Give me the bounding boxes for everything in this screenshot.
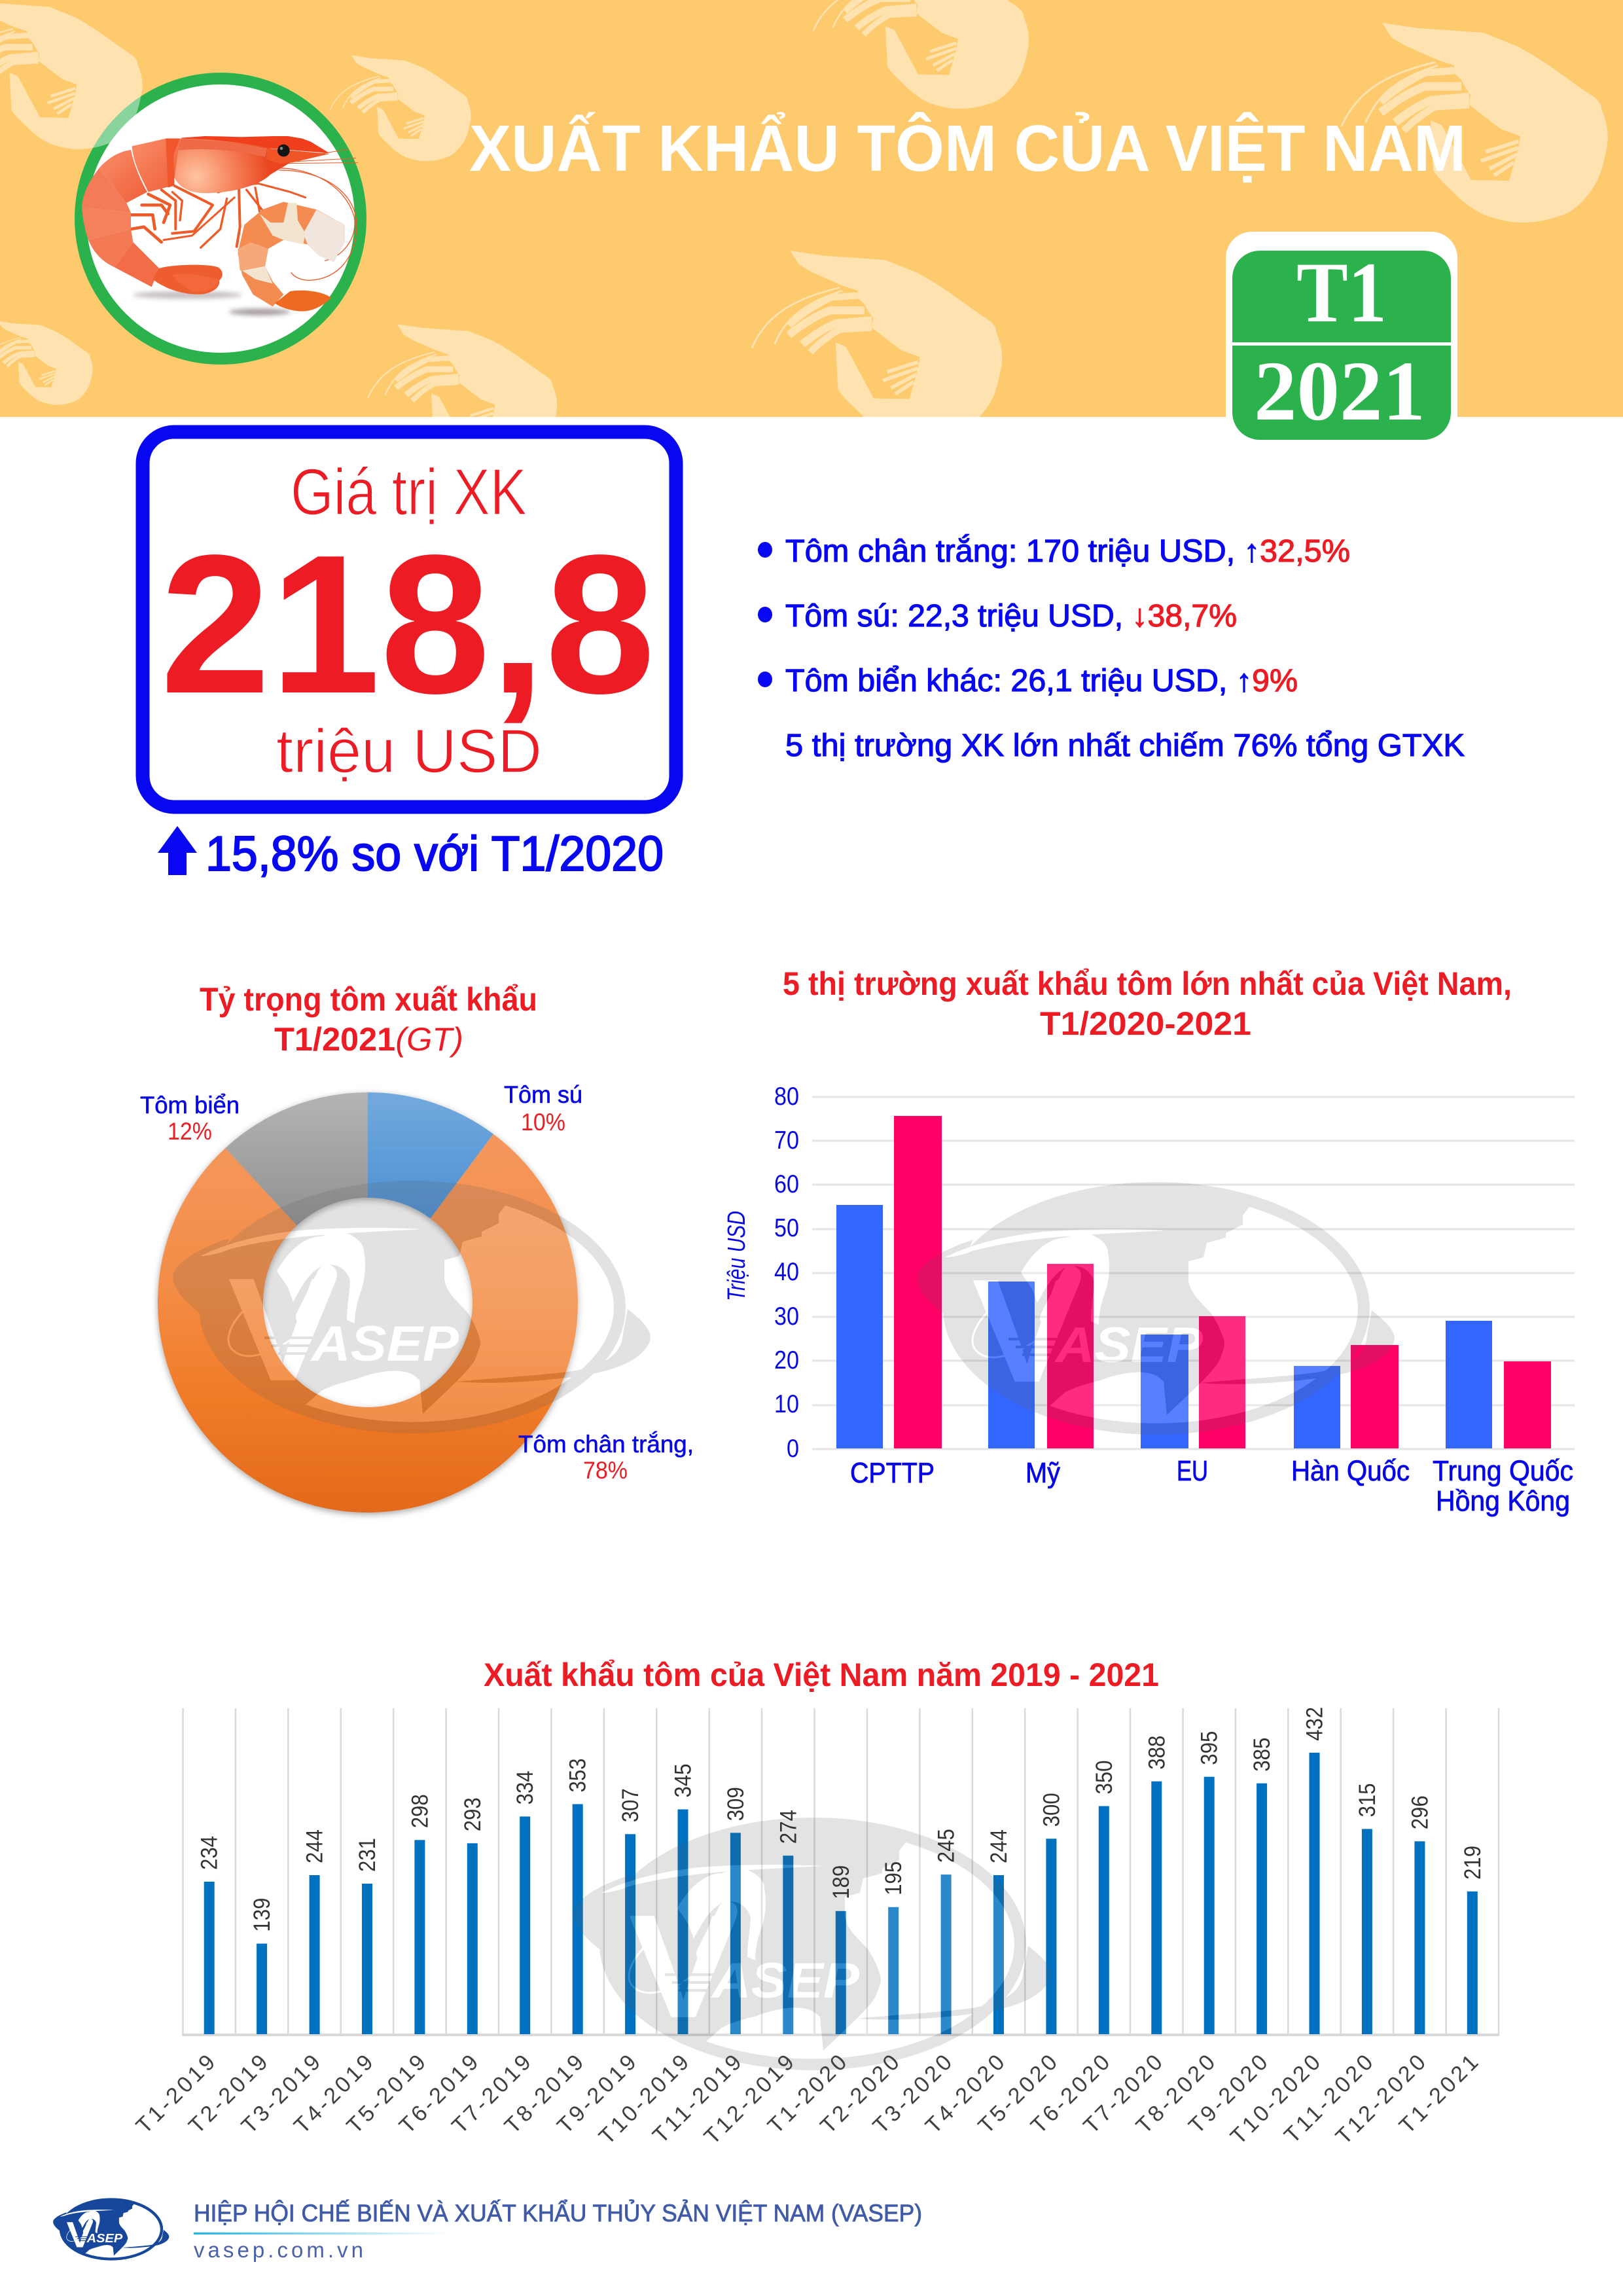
panel: key figures list bbox=[758, 533, 1465, 763]
category labels: CPTTP bbox=[850, 1457, 935, 1489]
value labels: 234 bbox=[197, 1836, 223, 1870]
donut title: Tỷ trọng tôm xuất khẩu bbox=[200, 981, 537, 1018]
title: XUẤT KHẨU TÔM CỦA VIỆT NAM bbox=[469, 111, 1466, 185]
month axis labels: T2-2019 bbox=[184, 2048, 275, 2138]
month axis labels bbox=[132, 2048, 1485, 2149]
month axis labels: T1-2021 bbox=[1395, 2048, 1485, 2138]
icon: up arrow bbox=[158, 826, 197, 875]
value labels: 244 bbox=[986, 1829, 1012, 1863]
y axis labels: 80 bbox=[774, 1083, 799, 1111]
bullet row 2: Tôm sú: 22,3 triệu USD, ↓38,7% bbox=[785, 599, 1237, 634]
month axis labels: T11-2020 bbox=[1279, 2048, 1380, 2148]
watermark: VASEP logo over bars bbox=[917, 1182, 1395, 1435]
value labels: 195 bbox=[881, 1861, 906, 1895]
value labels: 350 bbox=[1092, 1761, 1117, 1795]
watermark: VASEP logo over columns: V bbox=[628, 1884, 738, 2049]
label: Tôm sú: 10% bbox=[521, 1109, 565, 1136]
y axis labels: 10 bbox=[774, 1390, 799, 1418]
watermark: VASEP logo over columns bbox=[573, 1818, 1051, 2070]
watermark: VASEP logo over bars: ASEP bbox=[1054, 1318, 1203, 1373]
value labels: 231 bbox=[355, 1838, 380, 1872]
bars: 2021 series bbox=[894, 1116, 1551, 1448]
month axis labels: T8-2020 bbox=[1132, 2048, 1222, 2138]
badge year: 2021 bbox=[1254, 344, 1425, 439]
value labels: 388 bbox=[1144, 1736, 1169, 1770]
value labels: 293 bbox=[460, 1797, 486, 1831]
watermark: VASEP logo over bars: V bbox=[972, 1248, 1082, 1413]
category labels: Trung Quốc bbox=[1433, 1455, 1573, 1487]
footer organisation name: HIỆP HỘI CHẾ BIẾN VÀ XUẤT KHẨU THỦY SẢN VIỆT NAM (VASEP) bbox=[194, 2199, 922, 2227]
label: Tôm sú bbox=[504, 1081, 582, 1136]
value labels bbox=[197, 1707, 1486, 1932]
value labels: 245 bbox=[934, 1829, 959, 1863]
donut rings bbox=[158, 1092, 578, 1513]
value labels: 307 bbox=[618, 1788, 643, 1822]
period badge bbox=[1226, 232, 1457, 440]
panel: monthly export column chart bbox=[132, 1657, 1499, 2149]
month axis labels: T9-2019 bbox=[552, 2048, 643, 2138]
month axis labels: T6-2019 bbox=[395, 2048, 485, 2138]
panel: export value bbox=[143, 432, 676, 807]
chart title: 5 thị trường xuất khẩu tôm lớn nhất của Việt Nam, bbox=[783, 965, 1512, 1002]
value labels: 296 bbox=[1407, 1795, 1433, 1829]
donut title: T1/2021(GT) bbox=[274, 1021, 463, 1058]
watermark: VASEP logo over donut: V bbox=[228, 1247, 338, 1412]
value labels: 334 bbox=[512, 1770, 538, 1804]
y axis labels: 60 bbox=[774, 1170, 799, 1198]
label: Tôm chân trắng: 78% bbox=[583, 1457, 628, 1484]
value labels: 345 bbox=[670, 1763, 696, 1797]
y axis labels: 0 bbox=[787, 1435, 799, 1463]
chart title: Xuất khẩu tôm của Việt Nam năm 2019 - 2021 bbox=[484, 1657, 1159, 1693]
value labels: 315 bbox=[1355, 1783, 1380, 1817]
value labels: 385 bbox=[1249, 1738, 1275, 1772]
label: Tôm biển: 12% bbox=[168, 1118, 212, 1145]
month axis labels: T7-2020 bbox=[1079, 2048, 1169, 2138]
growth text: 15,8% so với T1/2020 bbox=[205, 826, 664, 881]
value labels: 219 bbox=[1460, 1846, 1486, 1880]
icon: VASEP logo: V bbox=[66, 2214, 94, 2255]
month axis labels: T8-2019 bbox=[500, 2048, 590, 2138]
bullet row 1: Tôm chân trắng: 170 triệu USD, ↑32,5% bbox=[785, 533, 1350, 569]
panel: donut chart bbox=[140, 981, 694, 1513]
value labels: 353 bbox=[565, 1758, 591, 1792]
month axis labels: T4-2020 bbox=[921, 2048, 1012, 2138]
month axis labels: T1-2019 bbox=[132, 2048, 222, 2138]
growth note bbox=[158, 826, 664, 881]
watermark: VASEP logo over donut bbox=[173, 1181, 651, 1433]
category labels bbox=[850, 1455, 1573, 1517]
category labels: Mỹ bbox=[1026, 1457, 1060, 1489]
label: Tôm chân trắng: Tôm chân trắng, bbox=[518, 1431, 694, 1458]
category labels: EU bbox=[1177, 1455, 1208, 1487]
header banner bbox=[0, 0, 1623, 466]
month axis labels: T2-2020 bbox=[815, 2048, 906, 2138]
month axis labels: T4-2019 bbox=[289, 2048, 380, 2138]
chart title bbox=[783, 965, 1512, 1042]
month axis labels: T10-2020 bbox=[1226, 2048, 1327, 2149]
category labels: Hàn Quốc bbox=[1291, 1455, 1410, 1487]
y axis labels: 30 bbox=[774, 1302, 799, 1331]
value labels: 244 bbox=[302, 1829, 328, 1863]
footer website: vasep.com.vn bbox=[194, 2238, 363, 2262]
label: Tôm biển: Tôm biển bbox=[140, 1092, 240, 1119]
value labels: 139 bbox=[249, 1898, 275, 1932]
y axis labels: 70 bbox=[774, 1126, 799, 1155]
summary line: 5 thị trường XK lớn nhất chiếm 76% tổng GTXK bbox=[785, 728, 1465, 763]
value labels: 189 bbox=[829, 1865, 854, 1899]
month axis labels: T9-2020 bbox=[1184, 2048, 1275, 2138]
value labels: 395 bbox=[1197, 1731, 1222, 1765]
label: Tôm chân trắng bbox=[518, 1431, 694, 1484]
month axis labels: T3-2019 bbox=[237, 2048, 327, 2138]
icon: VASEP logo: ASEP bbox=[86, 2231, 123, 2245]
month axis labels: T1-2020 bbox=[763, 2048, 853, 2138]
month axis labels: T5-2020 bbox=[973, 2048, 1064, 2138]
y axis labels: 50 bbox=[774, 1214, 799, 1242]
icon: VASEP logo bbox=[53, 2198, 169, 2261]
month axis labels: T6-2020 bbox=[1026, 2048, 1116, 2138]
monthly bars bbox=[204, 1753, 1478, 2034]
value labels: 298 bbox=[407, 1794, 433, 1828]
y axis labels: 40 bbox=[774, 1258, 799, 1286]
value unit: triệu USD bbox=[276, 717, 542, 786]
value number: 218,8 bbox=[160, 514, 655, 734]
bars: 2020 series bbox=[836, 1205, 1492, 1448]
value labels: 432 bbox=[1302, 1707, 1327, 1741]
value labels: 309 bbox=[723, 1787, 749, 1821]
month axis labels: T12-2020 bbox=[1331, 2048, 1433, 2149]
background shrimp silhouettes bbox=[0, 0, 1608, 417]
value labels: 274 bbox=[776, 1810, 801, 1844]
chart title: T1/2020-2021 bbox=[1040, 1005, 1251, 1042]
value labels: 300 bbox=[1039, 1793, 1064, 1827]
value label: Giá trị XK bbox=[291, 456, 527, 529]
month axis labels: T10-2019 bbox=[594, 2048, 696, 2149]
icon: shrimp medallion ring bbox=[80, 79, 361, 359]
y axis labels: 20 bbox=[774, 1346, 799, 1374]
month axis labels: T7-2019 bbox=[447, 2048, 538, 2138]
bullet row 3: Tôm biển khác: 26,1 triệu USD, ↑9% bbox=[785, 664, 1298, 698]
month axis labels: T11-2019 bbox=[648, 2048, 749, 2148]
label: Tôm sú: Tôm sú bbox=[504, 1081, 582, 1108]
icon: red shrimp illustration bbox=[82, 136, 358, 315]
category labels: Hồng Kông bbox=[1436, 1485, 1570, 1517]
month axis labels: T3-2020 bbox=[868, 2048, 959, 2138]
y axis title: Triệu USD bbox=[723, 1211, 751, 1301]
month axis labels: T12-2019 bbox=[700, 2048, 801, 2149]
month axis labels: T5-2019 bbox=[342, 2048, 433, 2138]
donut title bbox=[200, 981, 537, 1058]
y axis labels bbox=[774, 1083, 799, 1463]
watermark: VASEP logo over columns: ASEP bbox=[711, 1953, 859, 2009]
footer bbox=[53, 2198, 922, 2262]
badge month: T1 bbox=[1296, 244, 1387, 340]
watermark: VASEP logo over donut: ASEP bbox=[310, 1316, 459, 1372]
label: Tôm biển bbox=[140, 1092, 240, 1145]
panel: top 5 markets bar chart bbox=[723, 965, 1575, 1517]
